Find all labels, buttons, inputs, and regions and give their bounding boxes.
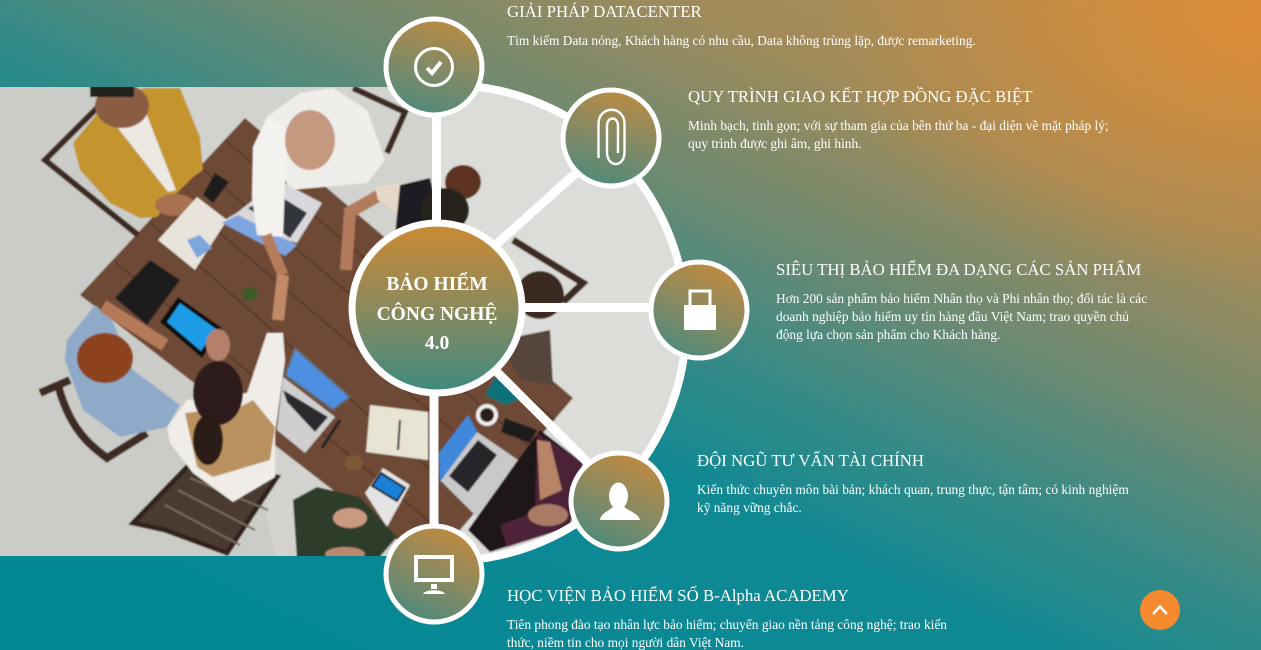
text block: advisors: [697, 451, 1129, 515]
blue tablet: [160, 297, 222, 358]
text block: datacenter: [507, 2, 976, 48]
bald man: [267, 88, 385, 190]
text block: datacenter: GIẢI PHÁP DATACENTER: [507, 2, 702, 21]
text block: advisors: kỹ năng vững chắc.: [697, 500, 802, 515]
text block: advisors: Kiến thức chuyên môn bài bản; khách quan, trung thực, tận tâm; có kinh nghiệm: [697, 482, 1129, 497]
right curly hair: [516, 271, 564, 319]
red hair man: [65, 305, 180, 437]
photo: team meeting around a wooden table: [0, 87, 682, 556]
text block: supermarket: Hơn 200 sản phẩm bảo hiểm Nhân thọ và Phi nhân thọ; đối tác là các: [776, 291, 1147, 306]
woman in tan: [167, 333, 285, 502]
black notebook: [115, 260, 180, 325]
text block: datacenter: Tìm kiếm Data nóng, Khách hàng có nhu cầu, Data không trùng lặp, được remarketing.: [507, 33, 976, 48]
cup and pen: [345, 455, 363, 471]
text block: supermarket: động lựa chọn sản phẩm cho Khách hàng.: [776, 327, 1000, 342]
back to top button: [1140, 590, 1180, 630]
icon: monitor: [414, 555, 454, 594]
yellow jacket man: [73, 88, 203, 218]
text block: contract process: [688, 86, 1109, 151]
text block: contract process: quy trình được ghi âm, ghi hình.: [688, 136, 862, 151]
phone and white notebook: [158, 197, 227, 270]
text block: academy: Tiên phong đào tạo nhân lực bảo hiểm; chuyển giao nền tảng công nghệ; trao kiến: [507, 617, 947, 632]
icon: person: [600, 482, 640, 520]
text block: advisors: ĐỘI NGŨ TƯ VẤN TÀI CHÍNH: [697, 451, 924, 470]
text block: academy: HỌC VIỆN BẢO HIỂM SỐ B-Alpha ACADEMY: [507, 586, 849, 605]
text block: supermarket: doanh nghiệp bảo hiểm uy tín hàng đầu Việt Nam; trao quyền chủ: [776, 309, 1129, 324]
text block: contract process: QUY TRÌNH GIAO KẾT HỢP ĐỒNG ĐẶC BIỆT: [688, 87, 1032, 106]
icon: paperclip: [598, 110, 624, 164]
infographic diagram: [0, 16, 750, 624]
curly hair woman: [346, 192, 385, 270]
center title: CÔNG NGHỆ: [377, 304, 497, 324]
text block: supermarket: SIÊU THỊ BẢO HIỂM ĐA DẠNG CÁC SẢN PHẨM: [776, 260, 1141, 279]
icon: check circle: [416, 48, 452, 86]
text block: academy: [507, 586, 947, 650]
center title: BẢO HIỂM: [386, 274, 488, 295]
node: paperclip: [563, 90, 659, 186]
node: lock: [651, 262, 747, 358]
laptop lower pie: [440, 432, 518, 517]
icon: lock: [684, 291, 716, 330]
node: person: [571, 453, 667, 549]
laptop: [277, 377, 335, 453]
table: [80, 118, 573, 565]
white arc frame: [470, 86, 686, 560]
node: monitor: [386, 526, 482, 622]
center title: 4.0: [425, 333, 449, 354]
text block: contract process: Minh bạch, tinh gọn; với sự tham gia của bên thứ ba - đại diện về mặt pháp lý;: [688, 118, 1109, 133]
center title: [377, 272, 497, 354]
text block: academy: thức, niềm tin cho mọi người dân Việt Nam.: [507, 635, 744, 650]
center circle: [352, 223, 522, 393]
man in maroon: [468, 430, 583, 552]
text block: supermarket: [776, 260, 1147, 342]
white spokes: [434, 100, 660, 540]
handwritten paper: [366, 405, 428, 460]
node: check: [386, 19, 482, 115]
small tablet: [365, 468, 410, 527]
person in green: [293, 487, 397, 560]
chairs: [45, 105, 138, 235]
